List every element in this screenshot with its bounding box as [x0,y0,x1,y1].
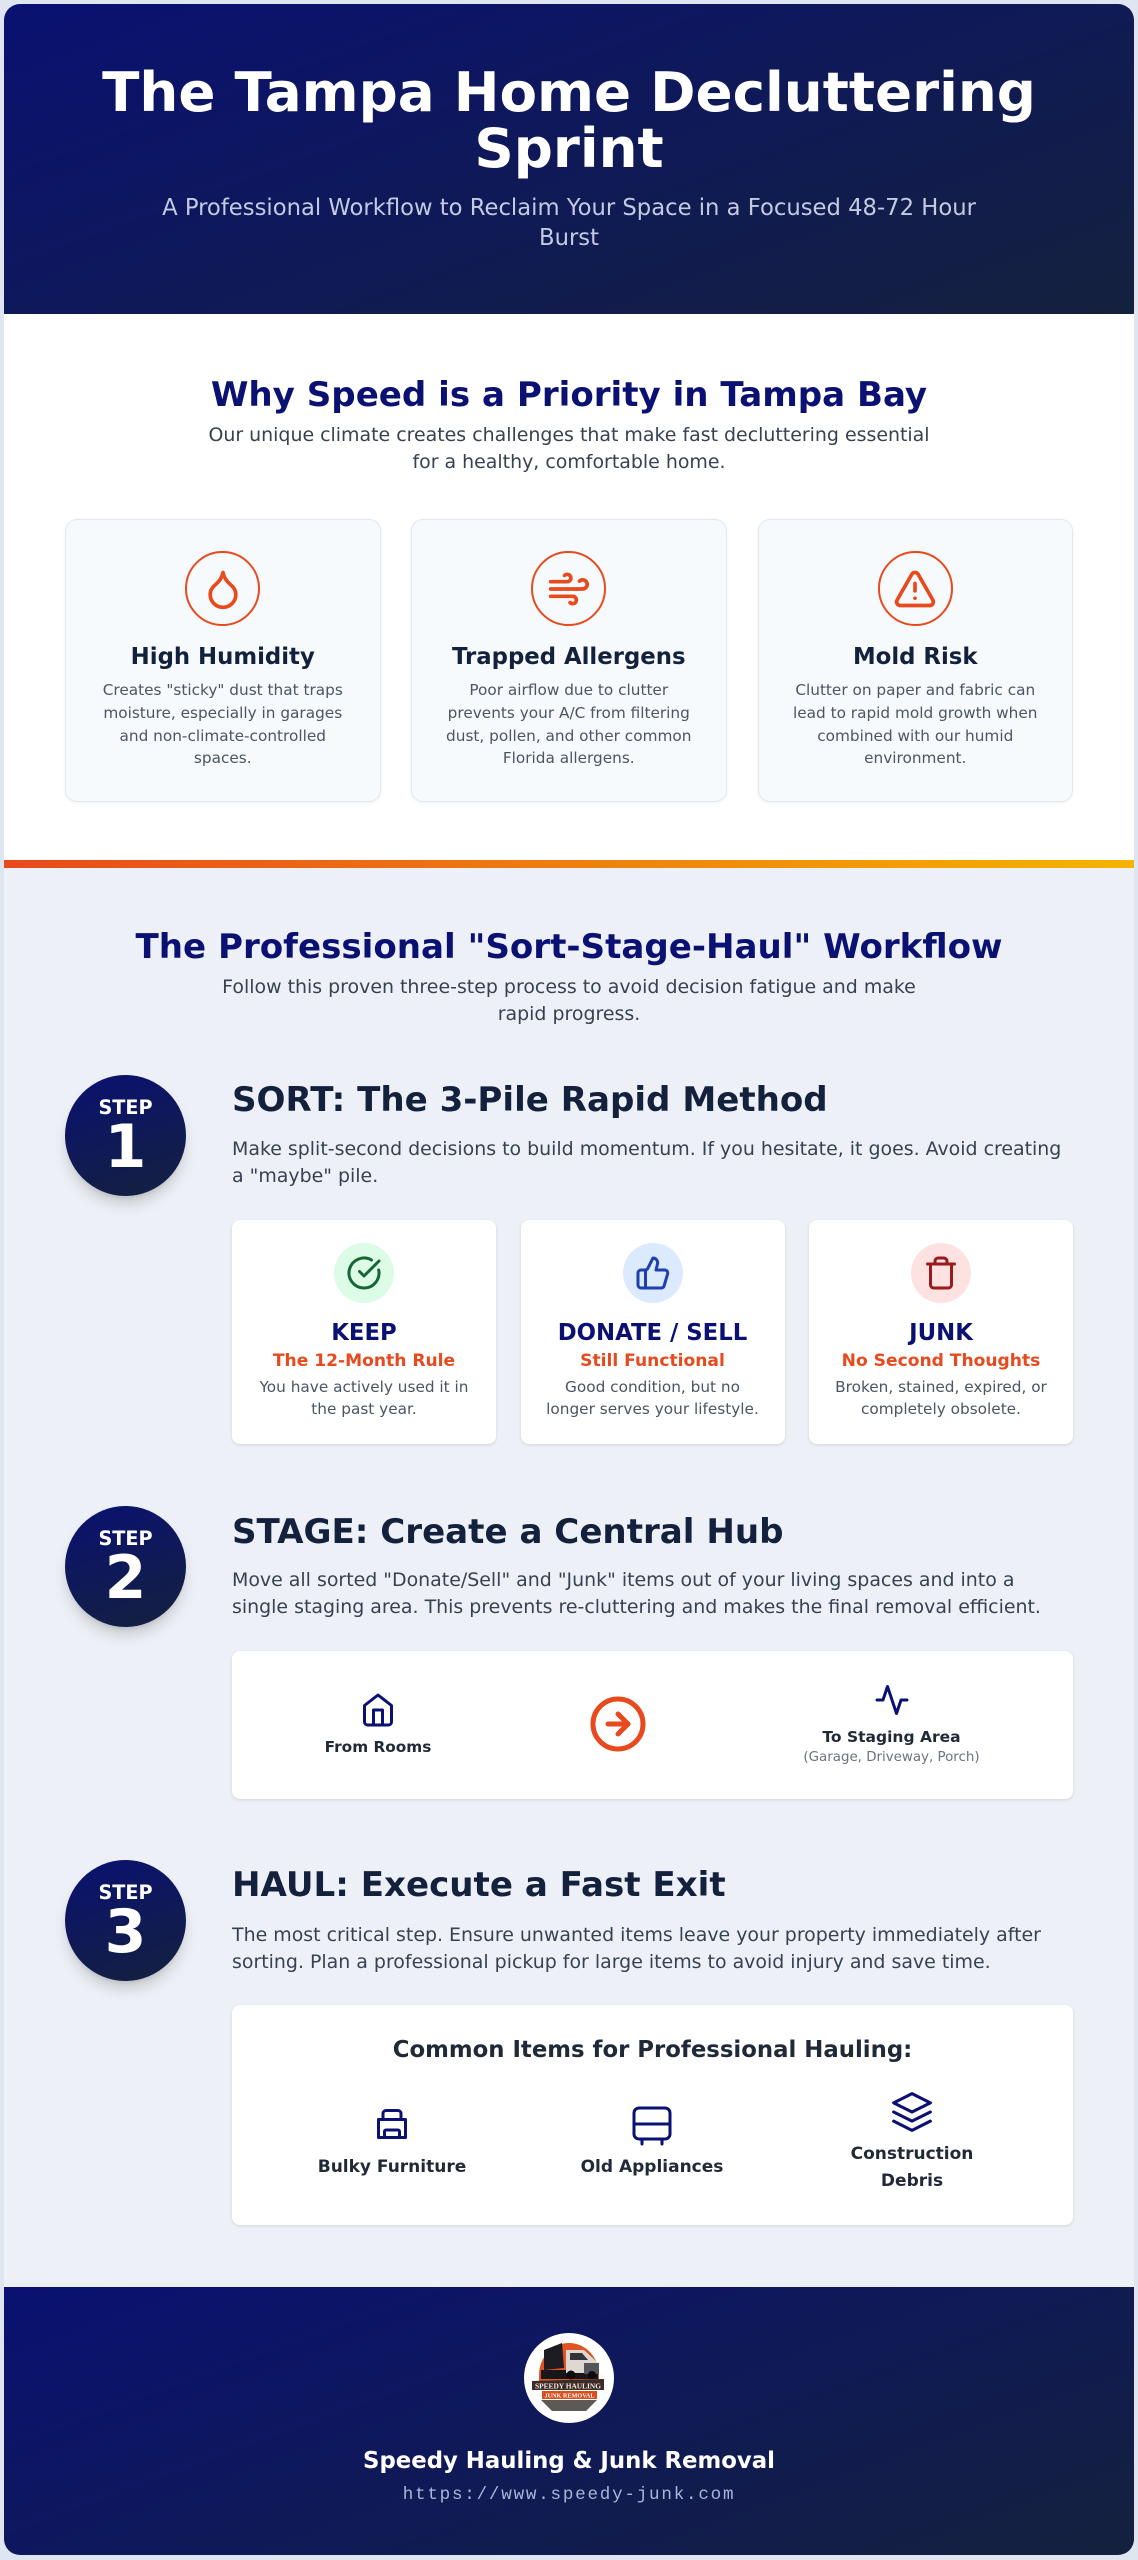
intro text: Our unique climate creates challenges that make fast decluttering essential [208,424,930,446]
step 1 heading: SORT: The 3-Pile Rapid Method [232,1080,828,1120]
step 3 badge [65,1860,186,1981]
label: construction debris: Construction [851,2144,973,2164]
step 3: haul [62,1860,1074,2227]
workflow intro text: rapid progress. [498,1002,640,1024]
step 2: stage [62,1506,1074,1801]
header banner [4,4,1134,314]
junk text: completely obsolete. [861,1400,1021,1418]
keep text [260,1378,468,1418]
card heading: Mold Risk [853,644,978,670]
card: common hauling items [232,2005,1073,2225]
logo badge: JUNK REMOVAL [544,2392,594,2400]
card text: dust, pollen, and other common [446,727,691,745]
step 1 badge: 1 [105,1112,146,1182]
icon: trash can [911,1243,971,1303]
step 2 badge [65,1506,186,1627]
card heading: High Humidity [131,644,315,670]
card: mold risk [758,519,1073,802]
icon: check circle [334,1243,394,1303]
card text: moisture, especially in garages [103,704,342,722]
icon: home [363,1694,393,1726]
step 2 badge: STEP [98,1527,153,1550]
arrow: to staging [590,1696,646,1752]
card: keep [232,1220,496,1444]
card text: and non-climate-controlled [120,727,326,745]
card text: Poor airflow due to clutter [469,681,668,699]
donate rule: Still Functional [580,1351,725,1371]
heading: workflow: The Professional "Sort-Stage-Haul" Workflow [136,926,1002,966]
icon: water drop [185,551,260,626]
icon: layers [892,2092,932,2132]
step 2 heading: STAGE: Create a Central Hub [232,1512,784,1552]
card text [793,681,1038,767]
card: donate / sell [520,1220,784,1444]
card text: Florida allergens. [503,749,635,767]
keep rule: The 12-Month Rule [273,1351,455,1371]
step 1 text: a "maybe" pile. [232,1164,378,1186]
icon: furniture [377,2109,407,2139]
label: bulky furniture: Bulky Furniture [318,2156,466,2176]
donate text: longer serves your lifestyle. [546,1400,759,1418]
keep text: the past year. [311,1400,417,1418]
label: staging locations: (Garage, Driveway, Porch) [803,1750,980,1765]
title: Sprint [474,116,664,180]
step 3 heading: HAUL: Execute a Fast Exit [232,1865,726,1905]
logo badge: SPEEDY HAULING [535,2382,601,2390]
label: from rooms: From Rooms [325,1738,431,1756]
label: old appliances: Old Appliances [581,2156,723,2176]
step 3 text: The most critical step. Ensure unwanted items leave your property immediately after [232,1924,1041,1946]
card: junk [809,1220,1073,1444]
step 1 badge: STEP [98,1096,153,1119]
gradient divider bar [4,860,1134,868]
step 3 badge: STEP [98,1881,153,1904]
donate heading: DONATE / SELL [558,1320,747,1346]
label: construction debris [851,2144,973,2190]
intro text [208,424,930,472]
card text [446,681,691,767]
step 1: sort [62,1075,1074,1446]
workflow intro text [222,976,916,1024]
title [102,60,1036,180]
label: construction debris: Debris [881,2170,943,2190]
subtitle: A Professional Workflow to Reclaim Your Space in a Focused 48-72 Hour [162,195,976,221]
card: staging flow [232,1651,1073,1799]
icon: warning triangle [878,551,952,626]
step 2 text: Move all sorted "Donate/Sell" and "Junk" items out of your living spaces and into a [232,1568,1014,1590]
icon: wind [531,551,606,626]
intro text: for a healthy, comfortable home. [412,450,726,472]
keep heading: KEEP [331,1320,397,1346]
subtitle [162,195,976,251]
panel: why speed is a priority [4,314,1134,860]
step 2 text [232,1568,1041,1618]
panel: workflow [4,866,1134,2287]
step 3 text: sorting. Plan a professional pickup for large items to avoid injury and save time. [232,1950,991,1972]
donate text: Good condition, but no [565,1378,740,1396]
step 1 text [232,1138,1061,1186]
logo badge [524,2333,614,2423]
website url: https://www.speedy-junk.com [403,2485,735,2505]
card text: combined with our humid [817,727,1013,745]
card heading: Common Items for Professional Hauling: [393,2037,912,2063]
junk text: Broken, stained, expired, or [835,1378,1047,1396]
icon: activity pulse [876,1685,908,1715]
label: to staging area: To Staging Area [822,1728,961,1746]
step 2 badge: 2 [105,1543,146,1613]
junk heading: JUNK [909,1320,973,1346]
donate text [546,1378,759,1418]
step 3 badge: 3 [105,1897,146,1967]
card text: prevents your A/C from filtering [448,704,690,722]
step 1 text: Make split-second decisions to build momentum. If you hesitate, it goes. Avoid creating [232,1138,1061,1160]
junk rule: No Second Thoughts [842,1351,1040,1371]
card text [103,681,343,767]
company name: Speedy Hauling & Junk Removal [363,2448,775,2474]
card: high humidity [65,519,380,802]
heading: why speed: Why Speed is a Priority in Tampa Bay [211,374,927,414]
card text: Creates "sticky" dust that traps [103,681,343,699]
card heading: Trapped Allergens [452,644,686,670]
card text: lead to rapid mold growth when [793,704,1038,722]
junk text [835,1378,1047,1418]
keep text: You have actively used it in [260,1378,468,1396]
subtitle: Burst [539,225,599,251]
card: trapped allergens [411,519,726,802]
title: The Tampa Home Decluttering [102,60,1036,124]
step 3 text [232,1924,1041,1972]
step 2 text: single staging area. This prevents re-cluttering and makes the final removal efficient. [232,1596,1041,1618]
card text: spaces. [194,749,252,767]
card text: environment. [864,749,966,767]
icon: appliance [632,2106,672,2146]
icon: thumbs up [622,1243,682,1303]
workflow intro text: Follow this proven three-step process to avoid decision fatigue and make [222,976,916,998]
footer [4,2287,1134,2555]
card text: Clutter on paper and fabric can [795,681,1035,699]
step 1 badge [65,1075,186,1196]
